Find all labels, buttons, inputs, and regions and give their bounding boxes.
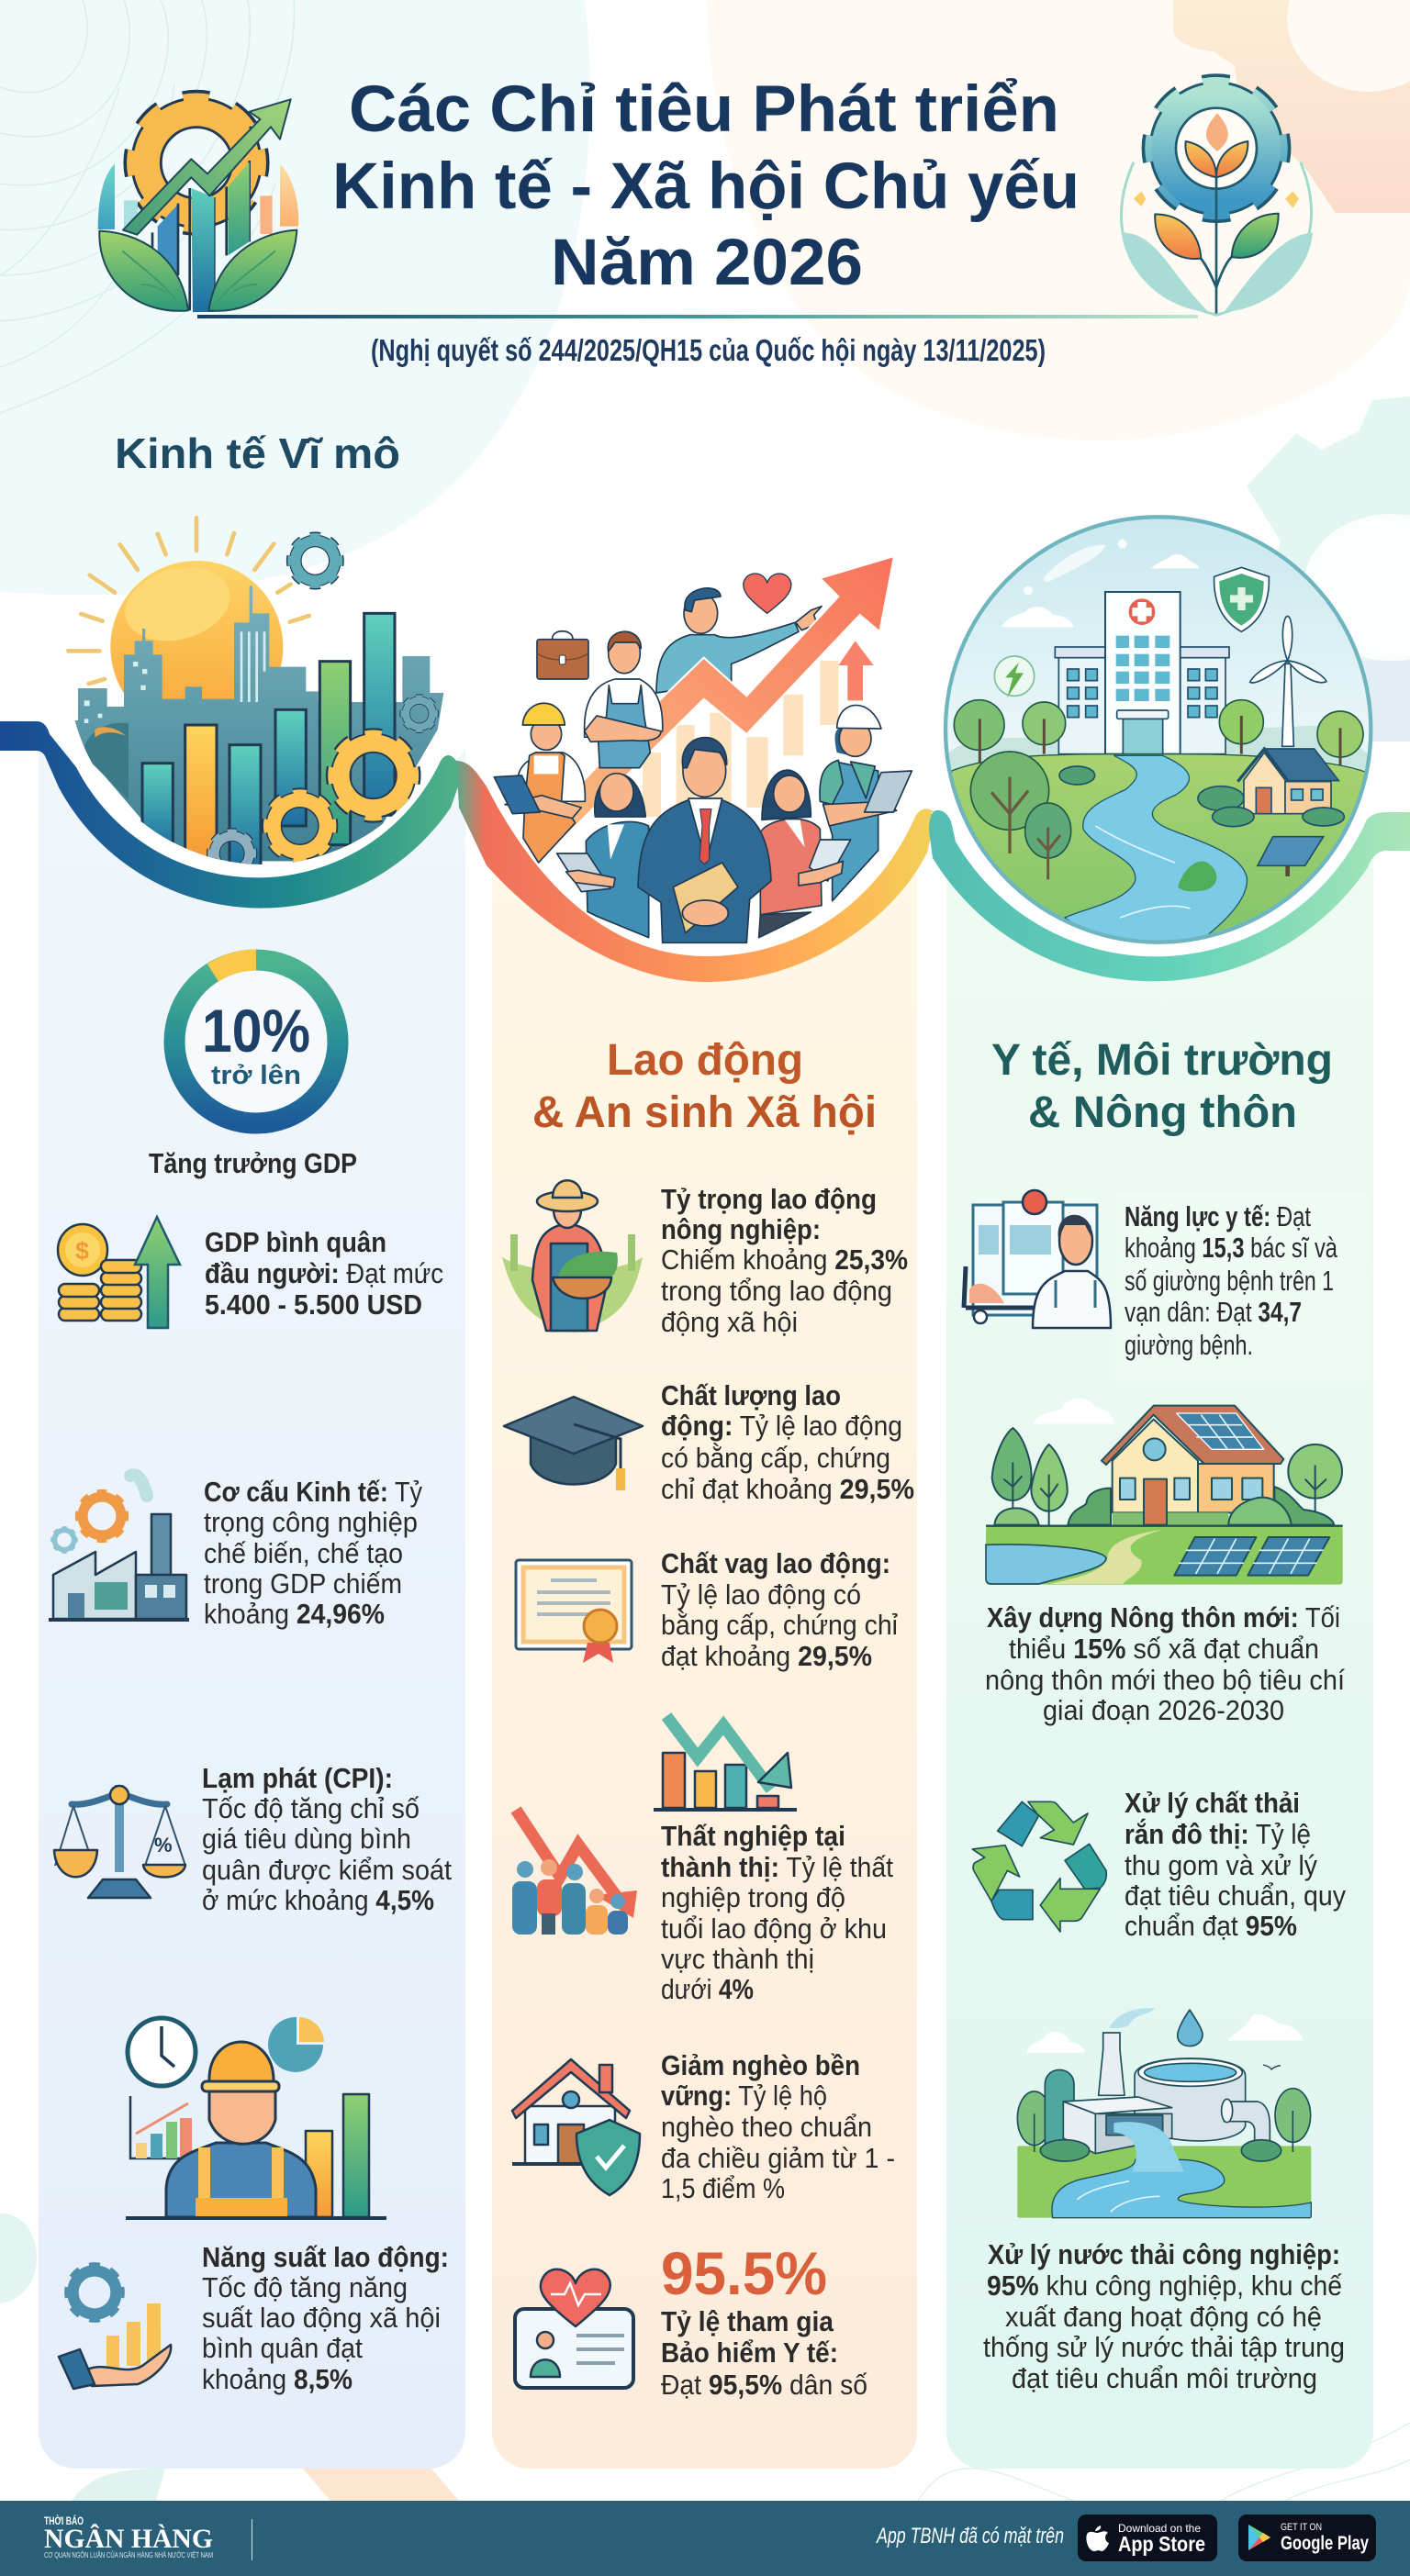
illustration: hospital, river and green village xyxy=(936,505,1386,954)
text: urban unemployment xyxy=(661,1820,893,2005)
text: urban unemployment: dưới 4% xyxy=(661,1973,754,2005)
text: sustainable poverty reduction: vững: Tỷ lệ hộ xyxy=(661,2080,827,2112)
growth arrow xyxy=(539,556,894,863)
text: agricultural labour share: Tỷ trọng lao động xyxy=(661,1183,877,1215)
text: inflation: Lạm phát (CPI): xyxy=(202,1762,393,1794)
text: inflation: giá tiêu dùng bình xyxy=(202,1823,411,1855)
person: woman in blue xyxy=(557,774,649,938)
text: urban solid waste xyxy=(1125,1787,1346,1942)
text: industrial wastewater: Xử lý nước thải công nghiệp: xyxy=(988,2238,1340,2270)
button: Google Play: GET IT ON xyxy=(1281,2522,1322,2533)
logo: Thời báo Ngân hàng: CƠ QUAN NGÔN LUẬN CỦA NGÂN HÀNG NHÀ NƯỚC VIỆT NAM xyxy=(44,2551,213,2559)
person: pointing man xyxy=(656,588,822,693)
text: urban solid waste: thu gom và xử lý xyxy=(1125,1849,1317,1881)
heading: Y tế, Môi trường & Nông thôn xyxy=(991,1036,1333,1137)
text: app availability: App TBNH đã có mặt trên xyxy=(876,2524,1064,2548)
heading: Y tế, Môi trường & Nông thôn: Y tế, Môi trường xyxy=(991,1036,1333,1085)
text: GDP per capita xyxy=(205,1226,443,1321)
text: labour qualification: Tỷ lệ lao động có xyxy=(661,1578,861,1611)
text: urban solid waste: đạt tiêu chuẩn, quy xyxy=(1125,1879,1346,1912)
islet xyxy=(1178,861,1216,891)
panel: Lao động & An sinh Xã hội xyxy=(456,556,936,2469)
text: labour quality: có bằng cấp, chứng xyxy=(661,1442,890,1474)
donut: GDP growth 10% xyxy=(174,960,338,1123)
stat: 95.5%: 95.5% xyxy=(661,2239,827,2307)
hospital xyxy=(1055,592,1229,754)
ribbon: macro economy xyxy=(0,721,464,909)
icon: briefcase xyxy=(537,631,588,679)
icon: heart xyxy=(744,574,791,613)
icon: coins and up arrow: $ xyxy=(75,1237,89,1265)
text: urban unemployment: nghiệp trong độ xyxy=(661,1881,845,1913)
text: new rural development xyxy=(985,1601,1345,1726)
text: industrial wastewater: đạt tiêu chuẩn môi trường xyxy=(1012,2362,1317,2394)
icon: wind turbine xyxy=(1250,617,1326,746)
illustration: workforce and growth arrow xyxy=(494,556,912,942)
text: labour productivity xyxy=(202,2241,449,2395)
text: urban unemployment: vực thành thị xyxy=(661,1943,814,1975)
icon: falling arrow and family xyxy=(512,1810,637,1935)
section heading: Kinh tế Vĩ mô: Kinh tế Vĩ mô xyxy=(115,429,400,477)
title xyxy=(332,73,1080,299)
person: central man in suit xyxy=(638,738,771,942)
ground xyxy=(951,753,1365,934)
heading: Lao động & An sinh Xã hội xyxy=(532,1036,877,1137)
text: labour productivity: Năng suất lao động: xyxy=(202,2241,449,2273)
subtitle: resolution reference: (Nghị quyết số 244/2025/QH15 của Quốc hội ngày 13/11/2025) xyxy=(371,333,1046,367)
button: App Store: App Store xyxy=(1118,2532,1205,2556)
icon: health insurance card xyxy=(515,2269,633,2388)
unit: trở lên xyxy=(211,1061,301,1090)
text: health insurance: Bảo hiểm Y tế: xyxy=(661,2336,838,2369)
text: labour qualification: Chất vag lao động: xyxy=(661,1547,890,1579)
note box and text: healthcare capacity: khoảng 15,3 bác sĩ và xyxy=(1125,1232,1338,1264)
trees behind xyxy=(954,700,1363,766)
text: economic structure: trong GDP chiếm xyxy=(204,1567,402,1600)
text: health insurance: Đạt 95,5% dân số xyxy=(661,2369,867,2401)
text: GDP per capita: GDP bình quân xyxy=(205,1226,386,1258)
river xyxy=(1065,755,1247,943)
person: worker in yellow hat xyxy=(494,703,585,863)
logo: Thời báo Ngân hàng: THỜI BÁO xyxy=(44,2514,84,2527)
note box and text: healthcare capacity xyxy=(1115,1193,1368,1381)
heading: Y tế, Môi trường & Nông thôn: & Nông thôn xyxy=(1028,1088,1297,1137)
text: sustainable poverty reduction xyxy=(661,2049,895,2204)
text: urban solid waste: rắn đô thị: Tỷ lệ xyxy=(1125,1817,1311,1850)
text: economic structure: trọng công nghiệp xyxy=(204,1506,418,1538)
text: agricultural labour share: nông nghiệp: xyxy=(661,1213,821,1245)
text: labour quality: chỉ đạt khoảng 29,5% xyxy=(661,1473,914,1505)
text: agricultural labour share: động xã hội xyxy=(661,1306,798,1338)
text: labour qualification: đạt khoảng 29,5% xyxy=(661,1640,872,1672)
text: urban unemployment: thành thị: Tỷ lệ thất xyxy=(661,1851,893,1883)
heading: Lao động & An sinh Xã hội: Lao động xyxy=(607,1036,803,1085)
text: health insurance xyxy=(661,2305,867,2401)
text: labour quality xyxy=(661,1379,914,1505)
note box and text: healthcare capacity: vạn dân: Đạt 34,7 xyxy=(1125,1296,1302,1328)
icon: economy growth emblem xyxy=(98,90,298,312)
text: inflation xyxy=(202,1762,452,1916)
illustration: worker, clock and charts xyxy=(126,2017,386,2218)
icon: society sprout gear emblem xyxy=(1121,74,1313,315)
background bars xyxy=(643,661,838,817)
logo: Thời báo Ngân hàng xyxy=(44,2514,213,2559)
text: sustainable poverty reduction: Giảm nghèo bền xyxy=(661,2049,860,2081)
icon: balance scale xyxy=(54,1785,185,1898)
heading: Lao động & An sinh Xã hội: & An sinh Xã hội xyxy=(532,1088,877,1137)
text: urban unemployment: tuổi lao động ở khu xyxy=(661,1912,887,1945)
title: Năm 2026 xyxy=(551,227,863,299)
text: urban solid waste: chuẩn đạt 95% xyxy=(1125,1910,1297,1942)
text: inflation: Tốc độ tăng chỉ số xyxy=(202,1792,420,1824)
ribbon: labour xyxy=(456,761,936,982)
text: labour productivity: Tốc độ tăng năng xyxy=(202,2271,408,2303)
icon: coins and up arrow xyxy=(58,1217,180,1328)
text: industrial wastewater: xuất đang hoạt động có hệ xyxy=(1005,2301,1322,2333)
text: labour qualification xyxy=(661,1547,898,1672)
text: GDP per capita: đầu người: Đạt mức xyxy=(205,1257,443,1289)
icon: certificate xyxy=(516,1560,632,1663)
label: GDP growth: Tăng trưởng GDP xyxy=(149,1147,357,1179)
text: inflation: quân được kiểm soát xyxy=(202,1854,452,1886)
text: labour productivity: bình quân đạt xyxy=(202,2332,363,2364)
big trees xyxy=(970,752,1071,879)
title underline xyxy=(197,315,1198,318)
person: woman in coral xyxy=(759,770,851,938)
panel: Y tế, Môi trường & Nông thôn xyxy=(929,505,1410,2469)
text: labour productivity: khoảng 8,5% xyxy=(202,2363,352,2395)
footer xyxy=(0,2501,1410,2576)
text: labour quality: động: Tỷ lệ lao động xyxy=(661,1410,902,1442)
button: App Store: Download on the xyxy=(1118,2522,1201,2535)
text: urban unemployment: Thất nghiệp tại xyxy=(661,1820,845,1852)
text: GDP per capita: 5.400 - 5.500 USD xyxy=(205,1288,422,1321)
note box and text: healthcare capacity: Năng lực y tế: Đạt xyxy=(1125,1200,1311,1232)
text: urban solid waste: Xử lý chất thải xyxy=(1125,1787,1300,1819)
text: economic structure: chế biến, chế tạo xyxy=(204,1537,403,1569)
text: sustainable poverty reduction: 1,5 điểm % xyxy=(661,2172,785,2204)
title: Kinh tế - Xã hội Chủ yếu xyxy=(332,151,1080,223)
button: App Store xyxy=(1078,2515,1217,2561)
text: agricultural labour share: Chiếm khoảng 25,3% xyxy=(661,1243,908,1276)
text: economic structure: Cơ cấu Kinh tế: Tỷ xyxy=(204,1476,422,1508)
logo: Thời báo Ngân hàng: NGÂN HÀNG xyxy=(44,2524,213,2554)
illustration: city, sun, bars and gears xyxy=(67,518,443,879)
icon: factory and gears xyxy=(49,1475,189,1620)
icon: recycling arrows xyxy=(972,1801,1106,1932)
text: economic structure xyxy=(204,1476,422,1630)
icon: farmer xyxy=(502,1180,643,1333)
house with solar roof xyxy=(1059,749,1344,827)
icon: balance scale: % xyxy=(154,1834,173,1857)
text: labour quality: Chất lượng lao xyxy=(661,1379,841,1411)
text: agricultural labour share xyxy=(661,1183,908,1338)
note box and text: healthcare capacity: số giường bệnh trên 1 xyxy=(1125,1265,1334,1297)
text: inflation: ở mức khoảng 4,5% xyxy=(202,1884,434,1916)
text: economic structure: khoảng 24,96% xyxy=(204,1598,385,1630)
text: health insurance: Tỷ lệ tham gia xyxy=(661,2305,834,2337)
text: industrial wastewater xyxy=(983,2238,1345,2394)
button: Google Play: Google Play xyxy=(1281,2533,1369,2554)
text: agricultural labour share: trong tổng lao động xyxy=(661,1275,892,1307)
person: overalls xyxy=(585,631,663,768)
icon: green energy xyxy=(994,656,1035,697)
text: new rural development: Xây dựng Nông thôn mới: Tối xyxy=(987,1601,1340,1634)
icon: doctor and hospital bed xyxy=(964,1190,1111,1328)
solar panel xyxy=(1258,837,1324,876)
text: new rural development: thiểu 15% số xã đạt chuẩn xyxy=(1009,1633,1319,1665)
person: worker in white hat xyxy=(820,705,912,901)
button: Google Play xyxy=(1238,2515,1376,2561)
text: new rural development: giai đoạn 2026-2030 xyxy=(1043,1694,1284,1726)
illustration: new rural house scene xyxy=(986,1399,1343,1585)
icon: hand holding gear and bars xyxy=(59,2261,171,2389)
text: industrial wastewater: thống sử lý nước thải tập trung xyxy=(983,2331,1345,2363)
ribbon: health and environment xyxy=(929,810,1410,981)
text: industrial wastewater: 95% khu công nghiệp, khu chế xyxy=(987,2269,1342,2302)
icon: graduation cap xyxy=(504,1397,643,1490)
icon: house and shield xyxy=(512,2059,640,2195)
illustration: industrial wastewater treatment xyxy=(1017,2008,1311,2218)
panel: Kinh tế Vĩ mô xyxy=(0,518,465,2469)
text: sustainable poverty reduction: nghèo theo chuẩn xyxy=(661,2111,872,2143)
text: labour productivity: suất lao động xã hội xyxy=(202,2302,441,2334)
value: 10% xyxy=(202,997,310,1065)
title: Các Chỉ tiêu Phát triển xyxy=(349,73,1059,146)
text: labour qualification: bằng cấp, chứng chỉ xyxy=(661,1609,898,1641)
icon: falling bar chart xyxy=(654,1716,797,1810)
text: sustainable poverty reduction: đa chiều giảm từ 1 - xyxy=(661,2142,895,2174)
text: new rural development: nông thôn mới theo bộ tiêu chí xyxy=(985,1664,1345,1696)
icon: shield xyxy=(1214,567,1269,631)
note box and text: healthcare capacity: giường bệnh. xyxy=(1125,1329,1253,1361)
